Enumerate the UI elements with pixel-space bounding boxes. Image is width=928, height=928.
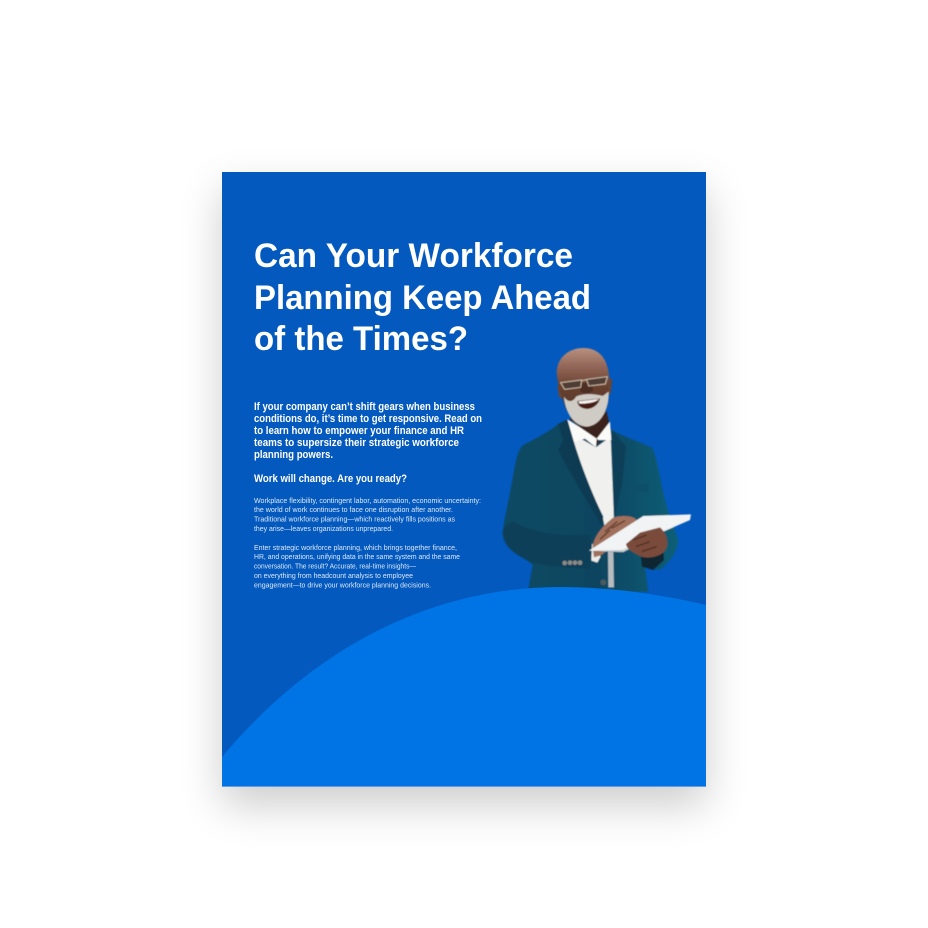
- jacket cuff buttons: [562, 560, 582, 565]
- subheading: Work will change. Are you ready?: [254, 473, 407, 485]
- body paragraph one: they arise—leaves organizations unprepared.: [254, 524, 393, 533]
- neck: [570, 412, 609, 446]
- light blue curved panel: [222, 587, 706, 787]
- page background: [222, 172, 706, 787]
- tablet: [589, 514, 691, 552]
- intro paragraph: conditions do, it’s time to get responsive. Read on: [254, 413, 482, 425]
- left lapel: [558, 419, 603, 526]
- left hand: [593, 516, 637, 557]
- dark watch sleeve: [641, 551, 664, 570]
- title: Planning Keep Ahead: [254, 279, 591, 317]
- photo: smiling man with tablet: [503, 348, 691, 592]
- body paragraph one: Traditional workforce planning—which reactively fills positions as: [254, 514, 455, 523]
- page bottom edge highlight: [222, 786, 706, 787]
- jacket: [503, 424, 678, 592]
- shirt collar: [567, 419, 611, 447]
- brochure page: [222, 172, 706, 787]
- intro paragraph: If your company can’t shift gears when business: [254, 401, 475, 413]
- body paragraph two: engagement—to drive your workforce planning decisions.: [254, 581, 431, 590]
- intro paragraph: teams to supersize their strategic workforce: [254, 437, 459, 449]
- body paragraph one: Workplace flexibility, contingent labor, automation, economic uncertainty:: [254, 496, 481, 505]
- right hand: [626, 527, 667, 558]
- title: of the Times?: [254, 320, 468, 358]
- nose: [580, 382, 593, 393]
- page drop shadow: [222, 172, 706, 787]
- body paragraph one: [254, 496, 481, 533]
- body paragraph two: conversation. The result? Accurate, real-time insights—: [254, 562, 416, 571]
- mouth: [577, 398, 600, 409]
- body paragraph two: HR, and operations, unifying data in the same system and the same: [254, 552, 460, 561]
- body paragraph one: the world of work continues to face one disruption after another.: [254, 505, 453, 514]
- body paragraph two: [254, 543, 460, 590]
- intro paragraph: [254, 401, 482, 461]
- glasses: [561, 377, 607, 389]
- breast pocket: [625, 484, 649, 493]
- sleeve shading: [503, 522, 592, 569]
- title: Can Your Workforce: [254, 237, 573, 275]
- intro paragraph: to learn how to empower your finance and HR: [254, 425, 464, 437]
- shirt: [573, 437, 614, 537]
- title: [254, 237, 591, 358]
- intro paragraph: planning powers.: [254, 449, 333, 461]
- ears: [557, 378, 612, 399]
- right lapel: [612, 430, 626, 518]
- body paragraph two: on everything from headcount analysis to employee: [254, 571, 413, 580]
- beard: [564, 392, 609, 427]
- body paragraph two: Enter strategic workforce planning, which brings together finance,: [254, 543, 457, 552]
- shirt cuff: [591, 543, 601, 563]
- front button: [600, 579, 606, 585]
- head: [557, 348, 609, 427]
- lower shirt strip: [608, 552, 614, 587]
